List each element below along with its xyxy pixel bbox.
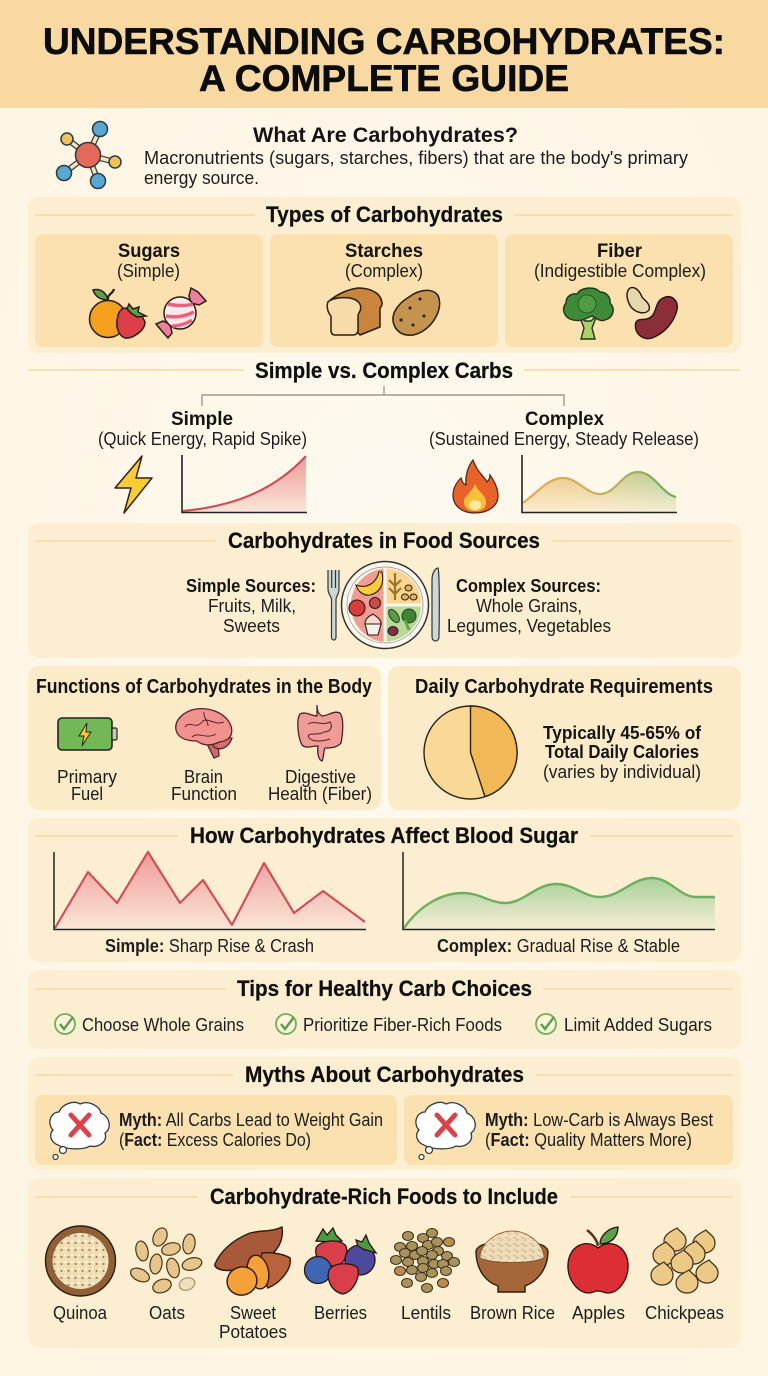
- panel: carbohydrates in food sources: [28, 523, 741, 658]
- label: primary fuel: Fuel: [71, 784, 103, 804]
- label: primary fuel: Primary: [57, 767, 117, 787]
- card: fiber: (Indigestible Complex): [534, 261, 706, 281]
- tree connector: [202, 386, 564, 406]
- heading: functions: Functions of Carbohydrates in the Body: [36, 676, 373, 698]
- definition text: energy source.: [144, 168, 259, 188]
- card: myth weight gain: [35, 1095, 397, 1165]
- food: sweet potatoes: [215, 1227, 290, 1342]
- text: complex sources: Whole Grains,: [476, 596, 582, 616]
- text: simple sources: Sweets: [223, 616, 280, 636]
- text: simple sources: Fruits, Milk,: [208, 596, 296, 616]
- text: daily range: [543, 723, 702, 782]
- icon: molecule: [56, 122, 121, 188]
- text: simple sources: Simple Sources:: [186, 576, 316, 596]
- label: digestive health: [268, 767, 372, 804]
- panel: carbohydrate-rich foods: [28, 1178, 741, 1348]
- text: complex sources: Complex Sources:: [456, 576, 601, 596]
- icon: potato: [393, 290, 440, 335]
- heading: types: Types of Carbohydrates: [266, 202, 503, 227]
- chart: simple rapid spike: [182, 455, 307, 512]
- icon: battery: [58, 718, 117, 750]
- card: starches: (Complex): [345, 261, 423, 281]
- label: brain function: Function: [171, 784, 237, 804]
- heading: myths: Myths About Carbohydrates: [245, 1062, 524, 1087]
- title: A COMPLETE GUIDE: [199, 58, 569, 99]
- label: digestive health: Digestive: [285, 767, 356, 787]
- text: myth 1: Myth: All Carbs Lead to Weight Gain: [119, 1110, 383, 1130]
- heading: foods to include: Carbohydrate-Rich Foods to Include: [210, 1184, 558, 1209]
- icon: fork: [328, 570, 339, 640]
- caption: simple: Simple: Sharp Rise & Crash: [105, 936, 314, 956]
- card: fiber: [505, 234, 733, 347]
- text: complex sources: [447, 576, 611, 636]
- icon: bread: [327, 288, 382, 335]
- card: sugars: [35, 234, 263, 347]
- food: brown rice: Brown Rice: [470, 1303, 555, 1323]
- text: daily range: Total Daily Calories: [545, 742, 699, 762]
- definition text: [144, 148, 688, 188]
- food: lentils: [390, 1228, 460, 1323]
- food: chickpeas: Chickpeas: [645, 1303, 724, 1323]
- text: complex: [429, 408, 699, 449]
- panel: functions of carbohydrates: [28, 666, 381, 810]
- tip: limit added sugars: Limit Added Sugars: [564, 1015, 712, 1035]
- icon: candy: [156, 288, 206, 338]
- card: sugars: (Simple): [117, 261, 180, 281]
- label: brain function: [171, 767, 237, 804]
- card: myth low-carb: [404, 1095, 733, 1165]
- icon: orange and strawberry: [90, 289, 146, 338]
- text: complex: Complex: [525, 408, 604, 430]
- text: daily range: Typically 45-65% of: [543, 723, 702, 743]
- food: sweet potatoes: Potatoes: [219, 1322, 287, 1342]
- panel: daily carbohydrate requirements: [388, 666, 741, 810]
- text: myth 2: Myth: Low-Carb is Always Best: [485, 1110, 713, 1130]
- panel: tips for healthy carb choices: [28, 970, 741, 1049]
- section: simple vs complex carbs: [28, 358, 740, 513]
- panel: how carbohydrates affect blood sugar: [28, 818, 741, 962]
- text: simple: (Quick Energy, Rapid Spike): [98, 429, 307, 449]
- card: fiber: Fiber: [597, 240, 642, 262]
- text: myth 2: [485, 1110, 713, 1150]
- text: simple: [98, 408, 307, 449]
- heading: blood sugar: How Carbohydrates Affect Blood Sugar: [190, 823, 578, 848]
- icon: lightning bolt: [115, 456, 152, 513]
- label: brain function: Brain: [184, 767, 223, 787]
- icon: plate with food: [342, 562, 428, 648]
- text: myth 1: [119, 1110, 383, 1150]
- food: sweet potatoes: Sweet: [230, 1303, 276, 1323]
- heading: food sources: Carbohydrates in Food Sources: [228, 528, 540, 553]
- definition text: Macronutrients (sugars, starches, fibers) that are the body's primary: [144, 148, 688, 168]
- food: apple: [568, 1227, 628, 1323]
- food: berries: [304, 1228, 376, 1323]
- panel: types of carbohydrates: [28, 197, 741, 353]
- food: chickpeas: [645, 1228, 724, 1323]
- food: brown rice: [470, 1231, 555, 1323]
- heading: daily requirements: Daily Carbohydrate Requirements: [415, 676, 713, 698]
- heading: tips: Tips for Healthy Carb Choices: [237, 976, 532, 1001]
- title banner: [0, 0, 768, 108]
- chart: simple sharp rise and crash: [54, 852, 366, 930]
- panel: myths about carbohydrates: [28, 1057, 741, 1170]
- pie chart: [424, 706, 517, 799]
- icon: knife: [432, 568, 439, 641]
- icon: beans: [627, 288, 677, 339]
- text: myth 1: (Fact: Excess Calories Do): [119, 1130, 311, 1150]
- caption: complex: Complex: Gradual Rise & Stable: [437, 936, 680, 956]
- heading: what are carbohydrates: What Are Carbohydrates?: [253, 124, 518, 147]
- icon: brain: [176, 709, 232, 758]
- card: starches: [270, 234, 498, 347]
- food: lentils: Lentils: [401, 1303, 451, 1323]
- title: UNDERSTANDING CARBOHYDRATES:: [43, 21, 725, 62]
- food: berries: Berries: [314, 1303, 367, 1323]
- food: oats: [128, 1226, 203, 1323]
- text: myth 2: (Fact: Quality Matters More): [485, 1130, 692, 1150]
- icon: flame: [453, 460, 498, 513]
- card: sugars: Sugars: [118, 240, 180, 262]
- text: daily range: (varies by individual): [543, 762, 701, 782]
- card: starches: Starches: [345, 240, 423, 262]
- icon: thought cloud with x: [50, 1102, 109, 1160]
- label: primary fuel: [57, 767, 117, 804]
- text: simple sources: [186, 576, 316, 636]
- icon: broccoli: [564, 288, 613, 339]
- chart: complex gradual rise and stable: [403, 852, 715, 930]
- food: oats: Oats: [149, 1303, 185, 1323]
- text: simple: Simple: [171, 408, 233, 430]
- food: apple: Apples: [572, 1303, 625, 1323]
- food: quinoa: [46, 1226, 116, 1323]
- text: complex: (Sustained Energy, Steady Release): [429, 429, 699, 449]
- text: complex sources: Legumes, Vegetables: [447, 616, 611, 636]
- label: digestive health: Health (Fiber): [268, 784, 372, 804]
- icon: intestines: [298, 705, 343, 761]
- heading: simple vs complex: Simple vs. Complex Carbs: [255, 358, 513, 383]
- section: what are carbohydrates: [56, 122, 688, 188]
- title: [43, 21, 725, 99]
- tip: fiber-rich foods: Prioritize Fiber-Rich Foods: [303, 1015, 502, 1035]
- food: quinoa: Quinoa: [53, 1303, 108, 1323]
- chart: complex steady release: [522, 455, 677, 512]
- tip: whole grains: Choose Whole Grains: [82, 1015, 244, 1035]
- icon: thought cloud with x: [416, 1102, 475, 1160]
